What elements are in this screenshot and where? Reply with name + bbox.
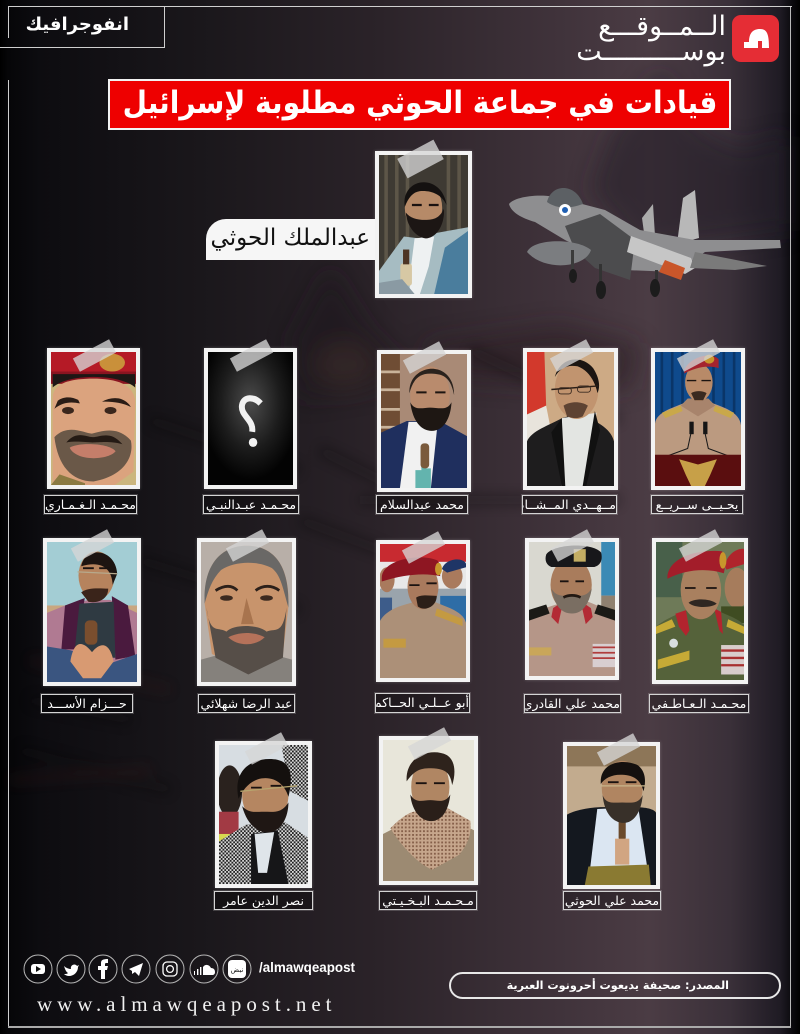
portrait: Abu Ali al-Hakem	[376, 540, 470, 682]
icon: nabd: نبض	[231, 966, 243, 974]
photo	[381, 354, 467, 488]
photo	[529, 542, 615, 676]
portrait: Mohammed Abdulnabi (unknown)	[204, 348, 297, 489]
social handle: /almawqeapost	[259, 960, 355, 975]
tape	[679, 529, 722, 562]
name label: محمد علي القادري	[524, 696, 620, 711]
tape	[225, 529, 269, 562]
title banner: قيادات في جماعة الحوثي مطلوبة لإسرائيل	[122, 85, 717, 121]
name label: يحـيــى ســريــع	[656, 497, 738, 512]
portrait: Nasr al-Din Amer	[215, 741, 312, 888]
photo	[51, 352, 136, 485]
photo	[527, 352, 614, 486]
portrait: Mahdi al-Mashat	[523, 348, 618, 490]
name label	[214, 891, 313, 910]
icon: nabd	[228, 960, 246, 978]
tape	[244, 732, 288, 765]
icon: twitter	[64, 965, 79, 976]
tape	[551, 529, 594, 562]
logo red mark	[732, 15, 779, 62]
portrait: Hazam al-Asad	[43, 538, 141, 686]
tape	[407, 727, 451, 760]
photo	[201, 542, 292, 682]
featured portrait: Abdulmalik al-Houthi	[375, 151, 472, 298]
name label: محـمـد عبـدالنبـي	[206, 497, 296, 512]
logo text: بوســــــــــت	[576, 36, 726, 67]
icon: instagram	[163, 962, 177, 976]
placeholder with question mark	[208, 352, 293, 474]
portrait: Abdulreza Shahlai	[197, 538, 296, 686]
photo	[219, 745, 308, 884]
photo	[567, 746, 656, 885]
tape	[596, 733, 640, 766]
source pill: المصدر: صحيفة يديعوت أحرونوت العبرية	[507, 979, 729, 992]
portrait: Mohammed al-Atifi	[652, 538, 748, 684]
social icons row	[24, 954, 252, 984]
name label: أبو عــلـي الحــاكم	[375, 695, 469, 710]
name label: نصر الدين عامر	[223, 893, 304, 908]
tag: infographic label: انفوجرافيك	[26, 14, 129, 35]
portrait: Yahya Saree	[651, 348, 745, 490]
tape	[403, 341, 446, 374]
photo	[379, 155, 468, 294]
icon: youtube	[31, 964, 45, 974]
featured leader name tag	[206, 219, 378, 260]
website url: www.almawqeapost.net	[37, 992, 336, 1016]
photo	[656, 542, 744, 680]
name label	[41, 694, 133, 713]
portrait: Mohammed Abdulsalam	[377, 350, 471, 492]
logo: Almawqea Post	[576, 11, 779, 67]
tape	[397, 140, 443, 178]
photo	[383, 740, 474, 881]
name label: محمد علي الحوثي	[565, 893, 659, 908]
portrait: Mohammed Ali al-Houthi	[563, 742, 660, 889]
name label: محـمـد الـغـمـاري	[45, 497, 136, 512]
photo	[47, 542, 137, 682]
tape	[677, 339, 720, 372]
source pill	[449, 972, 781, 999]
icon: soundcloud	[194, 965, 215, 975]
icon: telegram	[129, 963, 143, 976]
name label: محمد عبدالسلام	[380, 497, 464, 512]
portrait: Mohammed al-Bukhaiti	[379, 736, 478, 885]
portrait: Mohammed al-Ghamari	[47, 348, 140, 489]
fighter jet illustration	[509, 188, 781, 299]
tape	[72, 339, 116, 372]
logo text	[576, 11, 726, 67]
tape	[71, 529, 114, 562]
photo	[655, 352, 741, 486]
outer frame lines	[8, 6, 792, 7]
portrait: Mohammed Ali al-Qadiri	[525, 538, 619, 680]
name label: حـــزام الأســـد	[47, 696, 127, 711]
featured leader name tag: عبدالملك الحوثي	[211, 225, 370, 251]
title banner	[108, 79, 731, 130]
photo	[380, 544, 466, 678]
logo text: الــمــوقـــع	[598, 11, 726, 42]
name label: مـحـمـد البـخـيـتي	[382, 893, 474, 908]
tape	[402, 531, 445, 564]
tag: infographic label	[0, 7, 165, 48]
name label: عبد الرضا شهلائي	[201, 696, 292, 711]
name label: محـمـد الـعـاطـفي	[652, 696, 746, 711]
icon: facebook	[98, 959, 108, 979]
tape	[229, 339, 273, 372]
tape	[549, 339, 593, 372]
